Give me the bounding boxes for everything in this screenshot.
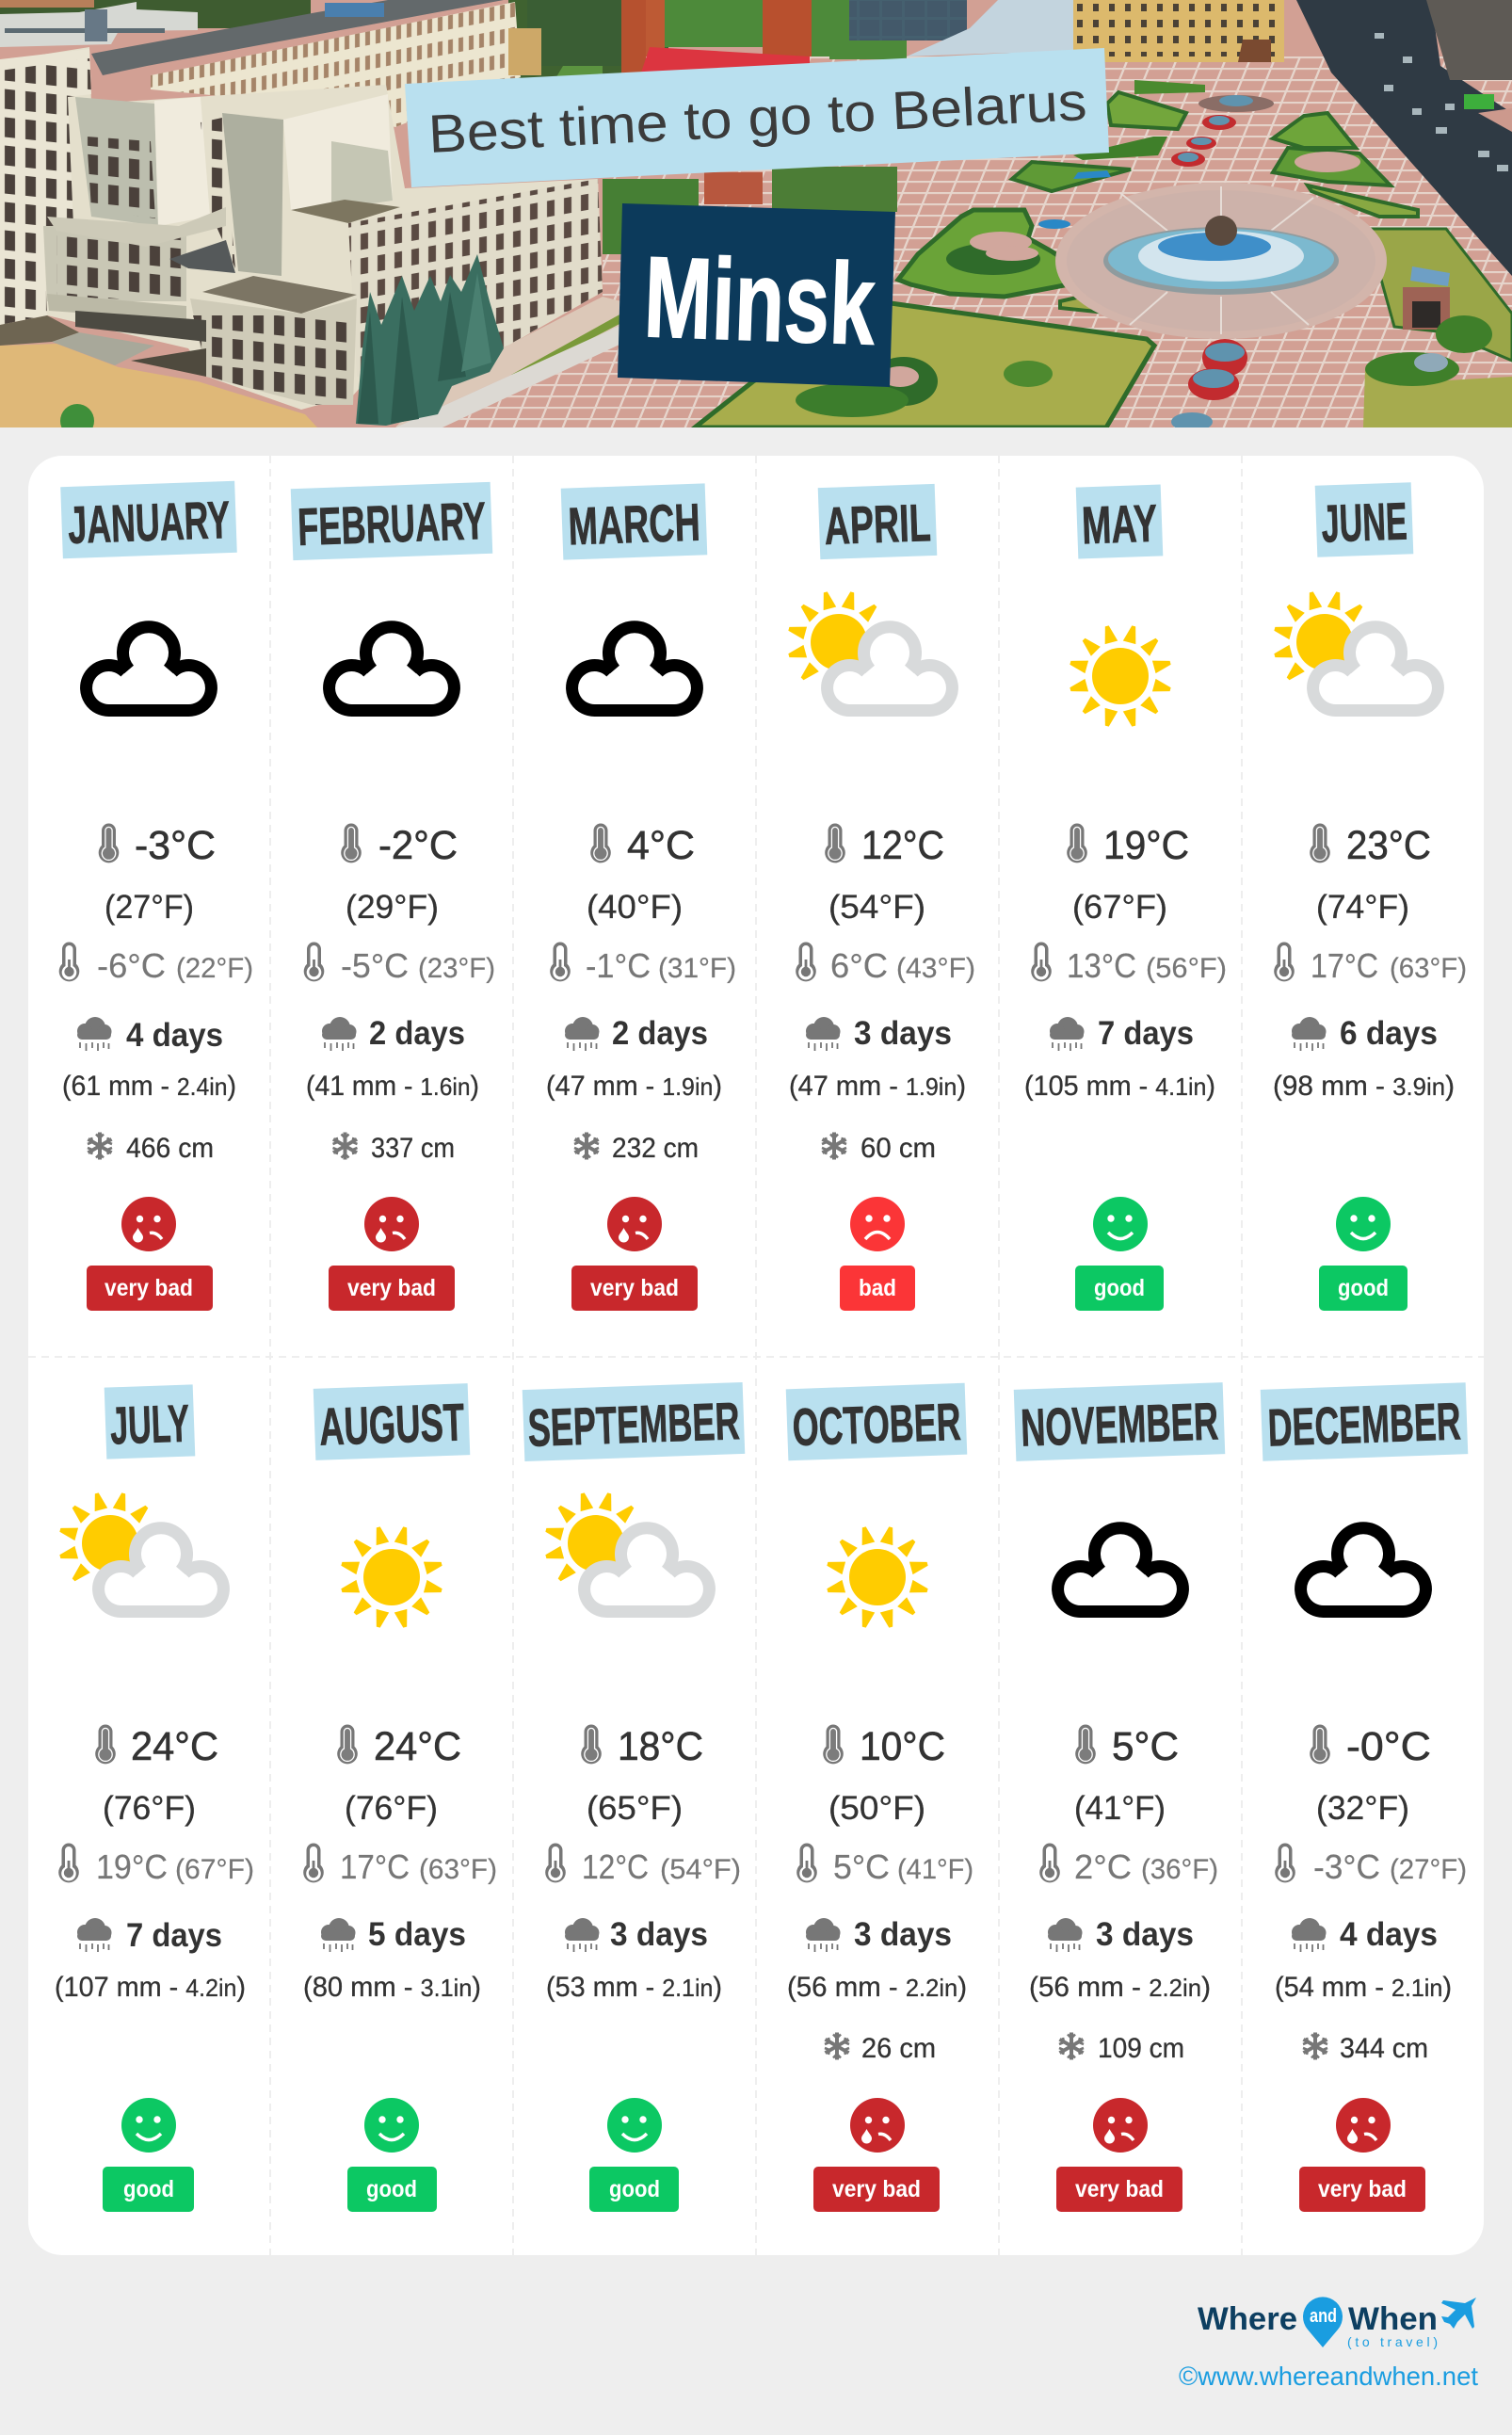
- average temperature F: (76°F): [345, 1790, 438, 1827]
- icon: cloud: [87, 627, 211, 710]
- average temperature: -0°C: [1346, 1724, 1431, 1769]
- title text: Best time to go to Belarus: [426, 72, 1088, 165]
- icon: thermometer: [1075, 1725, 1096, 1764]
- average temperature: 12°C: [861, 823, 944, 868]
- rainfall: (105 mm - 4.1in): [1024, 1071, 1215, 1102]
- icon: snowflake: [88, 1132, 112, 1160]
- rating badge: good: [366, 2176, 417, 2202]
- average temperature: 4°C: [627, 823, 695, 868]
- logo: Where and When to travel: (to travel): [1347, 2334, 1438, 2349]
- month label: JUNE: [1321, 491, 1408, 554]
- header photo: Minsk square: [0, 0, 1512, 438]
- average temperature F: (76°F): [103, 1790, 196, 1827]
- rainy days: 3 days: [854, 1916, 952, 1953]
- icon: low thermometer: [304, 942, 324, 981]
- month: October: [786, 1383, 973, 2212]
- rainy days: 3 days: [854, 1015, 952, 1052]
- icon: snowflake: [1059, 2032, 1084, 2060]
- icon: snowflake: [333, 1132, 358, 1160]
- icon: map pin: [1303, 2297, 1343, 2347]
- low temperature F: (63°F): [419, 1854, 497, 1885]
- average temperature: 24°C: [374, 1724, 461, 1769]
- icon: thermometer: [1310, 823, 1330, 863]
- month label: OCTOBER: [792, 1392, 962, 1457]
- rating badge: [103, 2167, 194, 2212]
- low temperature: 19°C: [96, 1847, 168, 1886]
- snowfall: 337 cm: [371, 1133, 455, 1164]
- icon: snowflake: [825, 2032, 849, 2060]
- rainfall: (98 mm - 3.9in): [1273, 1071, 1455, 1102]
- rainy days: 5 days: [368, 1916, 466, 1953]
- icon: very bad face: [607, 1197, 662, 1251]
- low temperature F: (22°F): [176, 953, 253, 984]
- month label: MAY: [1081, 493, 1158, 555]
- icon: rain: [1292, 1017, 1326, 1051]
- icon: rain: [321, 1918, 356, 1952]
- rating badge: very bad: [1075, 2176, 1164, 2202]
- snowfall: 26 cm: [861, 2033, 936, 2064]
- average temperature F: (40°F): [587, 889, 683, 926]
- icon: cloud: [1301, 1528, 1425, 1612]
- icon: rain: [806, 1017, 840, 1051]
- month label: [60, 481, 237, 558]
- rating badge: very bad: [347, 1275, 436, 1301]
- month label: [561, 483, 707, 560]
- icon: thermometer: [581, 1725, 602, 1764]
- month label: APRIL: [824, 492, 932, 556]
- logo: Where and When to travel: Where: [1198, 2301, 1297, 2337]
- average temperature: 24°C: [131, 1724, 218, 1769]
- rating badge: [1299, 2167, 1425, 2212]
- average temperature: 5°C: [1112, 1724, 1179, 1769]
- snowfall: 232 cm: [612, 1133, 699, 1164]
- rating badge: good: [123, 2176, 174, 2202]
- average temperature F: (27°F): [105, 889, 194, 926]
- low temperature F: (23°F): [418, 953, 495, 984]
- month label: [818, 484, 937, 559]
- icon: sun behind cloud: [1273, 590, 1438, 710]
- month: August: [303, 1383, 497, 2212]
- rating badge: [1319, 1266, 1407, 1311]
- icon: low thermometer: [59, 942, 79, 981]
- average temperature: 19°C: [1103, 823, 1189, 868]
- rating badge: [571, 1266, 698, 1311]
- icon: good face: [364, 2098, 419, 2153]
- icon: very bad face: [1093, 2098, 1148, 2153]
- low temperature: 17°C: [1311, 946, 1378, 985]
- rating badge: very bad: [1318, 2176, 1407, 2202]
- rating badge: good: [1094, 1275, 1145, 1301]
- icon: thermometer: [1310, 1725, 1330, 1764]
- month: March: [546, 483, 736, 1311]
- icon: rain: [77, 1918, 111, 1952]
- icon: very bad face: [121, 1197, 176, 1251]
- icon: thermometer: [95, 1725, 116, 1764]
- rating badge: [347, 2167, 437, 2212]
- icon: good face: [121, 2098, 176, 2153]
- low temperature: 12°C: [582, 1847, 649, 1886]
- icon: very bad face: [364, 1197, 419, 1251]
- rainfall: (56 mm - 2.2in): [787, 1972, 967, 2003]
- month label: JANUARY: [67, 490, 231, 555]
- month label: MARCH: [568, 492, 701, 556]
- snowfall: 344 cm: [1340, 2033, 1428, 2064]
- icon: thermometer: [341, 823, 362, 863]
- logo: Where and When to travel: [1198, 2297, 1476, 2349]
- low temperature: -3°C: [1313, 1847, 1380, 1886]
- rating badge: [87, 1266, 213, 1311]
- icon: rain: [1292, 1918, 1326, 1952]
- low temperature: -6°C: [97, 946, 166, 985]
- average temperature: 18°C: [618, 1724, 703, 1769]
- website credit: ©www.whereandwhen.net: [1179, 2362, 1478, 2391]
- icon: thermometer: [99, 823, 119, 863]
- rainfall: (107 mm - 4.2in): [55, 1972, 246, 2003]
- low temperature F: (27°F): [1390, 1854, 1467, 1885]
- rating badge: very bad: [832, 2176, 921, 2202]
- average temperature F: (41°F): [1074, 1790, 1166, 1827]
- month: November: [1014, 1382, 1225, 2212]
- month label: [1014, 1382, 1225, 1461]
- month label: [523, 1382, 745, 1461]
- panel: months grid: [28, 456, 1484, 2255]
- month label: [786, 1383, 967, 1460]
- low temperature F: (36°F): [1141, 1854, 1218, 1885]
- city name: Minsk: [642, 233, 877, 369]
- average temperature: 23°C: [1346, 823, 1431, 868]
- rainfall: (47 mm - 1.9in): [546, 1071, 722, 1102]
- low temperature: -5°C: [341, 946, 409, 985]
- average temperature F: (65°F): [587, 1790, 683, 1827]
- month: June: [1273, 482, 1467, 1311]
- rainfall: (41 mm - 1.6in): [306, 1071, 479, 1102]
- rating badge: [1075, 1266, 1164, 1311]
- rating badge: [1056, 2167, 1182, 2212]
- icon: rain: [322, 1017, 356, 1051]
- title banner: [405, 48, 1109, 187]
- month label: [314, 1383, 470, 1460]
- icon: very bad face: [850, 2098, 905, 2153]
- icon: thermometer: [337, 1725, 358, 1764]
- low temperature F: (56°F): [1146, 953, 1227, 984]
- month label: AUGUST: [318, 1392, 465, 1457]
- icon: rain: [77, 1017, 111, 1051]
- average temperature F: (50°F): [828, 1790, 925, 1827]
- low temperature: -1°C: [586, 946, 651, 985]
- rating badge: [589, 2167, 679, 2212]
- average temperature F: (54°F): [828, 889, 925, 926]
- rating badge: bad: [859, 1275, 896, 1301]
- month label: JULY: [109, 1394, 190, 1455]
- icon: thermometer: [825, 823, 845, 863]
- snowfall: 109 cm: [1098, 2033, 1184, 2064]
- icon: thermometer: [1067, 823, 1087, 863]
- rainy days: 3 days: [610, 1916, 708, 1953]
- rainfall: (53 mm - 2.1in): [546, 1972, 722, 2003]
- low temperature: 2°C: [1074, 1847, 1132, 1886]
- icon: thermometer: [590, 823, 611, 863]
- icon: good face: [607, 2098, 662, 2153]
- low temperature F: (41°F): [897, 1854, 973, 1885]
- rainy days: 7 days: [126, 1917, 222, 1954]
- rainfall: (54 mm - 2.1in): [1275, 1972, 1452, 2003]
- low temperature: 5°C: [833, 1847, 890, 1886]
- icon: low thermometer: [796, 1844, 817, 1882]
- icon: low thermometer: [1274, 942, 1295, 981]
- low temperature F: (43°F): [896, 953, 975, 984]
- average temperature F: (67°F): [1072, 889, 1167, 926]
- month label: NOVEMBER: [1020, 1391, 1219, 1458]
- icon: low thermometer: [796, 942, 816, 981]
- month label: [291, 482, 492, 560]
- month label: [1076, 484, 1163, 559]
- icon: bad face: [850, 1197, 905, 1251]
- icon: sun behind cloud: [58, 1492, 223, 1612]
- month label: SEPTEMBER: [527, 1391, 741, 1458]
- icon: thermometer: [823, 1725, 844, 1764]
- month: May: [1024, 484, 1227, 1311]
- icon: good face: [1093, 1197, 1148, 1251]
- rainfall: (56 mm - 2.2in): [1029, 1972, 1211, 2003]
- rainfall: (61 mm - 2.4in): [62, 1071, 236, 1102]
- icon: low thermometer: [1031, 942, 1052, 981]
- rating badge: very bad: [590, 1275, 679, 1301]
- icon: good face: [1336, 1197, 1391, 1251]
- rainy days: 4 days: [1340, 1916, 1438, 1953]
- month label: [1315, 482, 1413, 557]
- icon: snowflake: [822, 1132, 846, 1160]
- rainy days: 2 days: [612, 1015, 708, 1052]
- icon: low thermometer: [1275, 1844, 1295, 1882]
- rainy days: 2 days: [369, 1015, 465, 1052]
- snowfall: 60 cm: [861, 1133, 936, 1164]
- icon: sun behind cloud: [544, 1492, 709, 1612]
- average temperature: -3°C: [135, 823, 216, 868]
- city banner: Minsk: [618, 203, 895, 387]
- rating badge: [840, 1266, 915, 1311]
- icon: cloud: [1058, 1528, 1182, 1612]
- icon: snowflake: [1303, 2032, 1327, 2060]
- icon: very bad face: [1336, 2098, 1391, 2153]
- icon: low thermometer: [545, 1844, 566, 1882]
- snowfall: 466 cm: [126, 1133, 214, 1164]
- month: February: [291, 482, 495, 1311]
- rainfall: (80 mm - 3.1in): [303, 1972, 481, 2003]
- rainy days: 7 days: [1098, 1015, 1194, 1052]
- rainy days: 3 days: [1096, 1916, 1194, 1953]
- average temperature F: (29°F): [346, 889, 439, 926]
- icon: sun: [1069, 624, 1172, 728]
- month: January: [59, 481, 253, 1311]
- average temperature: -2°C: [378, 823, 458, 868]
- icon: plane: [1441, 2298, 1476, 2329]
- average temperature: 10°C: [860, 1724, 945, 1769]
- rating badge: good: [609, 2176, 660, 2202]
- icon: sun: [826, 1525, 929, 1629]
- rating badge: good: [1338, 1275, 1389, 1301]
- low temperature F: (63°F): [1390, 953, 1467, 984]
- rainy days: 6 days: [1340, 1015, 1438, 1052]
- icon: snowflake: [574, 1132, 599, 1160]
- icon: rain: [806, 1918, 840, 1952]
- icon: sun: [340, 1525, 443, 1629]
- icon: low thermometer: [58, 1844, 79, 1882]
- icon: rain: [565, 1017, 599, 1051]
- icon: low thermometer: [550, 942, 571, 981]
- month label: FEBRUARY: [297, 491, 487, 556]
- average temperature F: (74°F): [1316, 889, 1409, 926]
- rainy days: 4 days: [126, 1017, 223, 1054]
- month label: [105, 1384, 195, 1459]
- icon: rain: [1048, 1918, 1083, 1952]
- icon: rain: [565, 1918, 599, 1952]
- low temperature: 6°C: [830, 946, 888, 985]
- icon: sun behind cloud: [787, 590, 952, 710]
- low temperature: 13°C: [1067, 946, 1136, 985]
- logo: Where and When to travel: When: [1348, 2301, 1438, 2337]
- month: April: [787, 484, 975, 1311]
- low temperature: 17°C: [340, 1847, 410, 1886]
- month: July: [55, 1384, 254, 2212]
- low temperature F: (31°F): [658, 953, 736, 984]
- rainfall: (47 mm - 1.9in): [789, 1071, 966, 1102]
- icon: rain: [1050, 1017, 1085, 1051]
- logo: Where and When to travel: and: [1310, 2306, 1337, 2327]
- rating badge: [813, 2167, 940, 2212]
- month: September: [523, 1382, 745, 2212]
- icon: low thermometer: [303, 1844, 324, 1882]
- low temperature F: (54°F): [660, 1854, 741, 1885]
- rating badge: [329, 1266, 455, 1311]
- icon: low thermometer: [1039, 1844, 1060, 1882]
- rating badge: very bad: [105, 1275, 193, 1301]
- low temperature F: (67°F): [175, 1854, 254, 1885]
- month: December: [1261, 1382, 1468, 2212]
- icon: cloud: [330, 627, 454, 710]
- average temperature F: (32°F): [1316, 1790, 1409, 1827]
- icon: cloud: [572, 627, 697, 710]
